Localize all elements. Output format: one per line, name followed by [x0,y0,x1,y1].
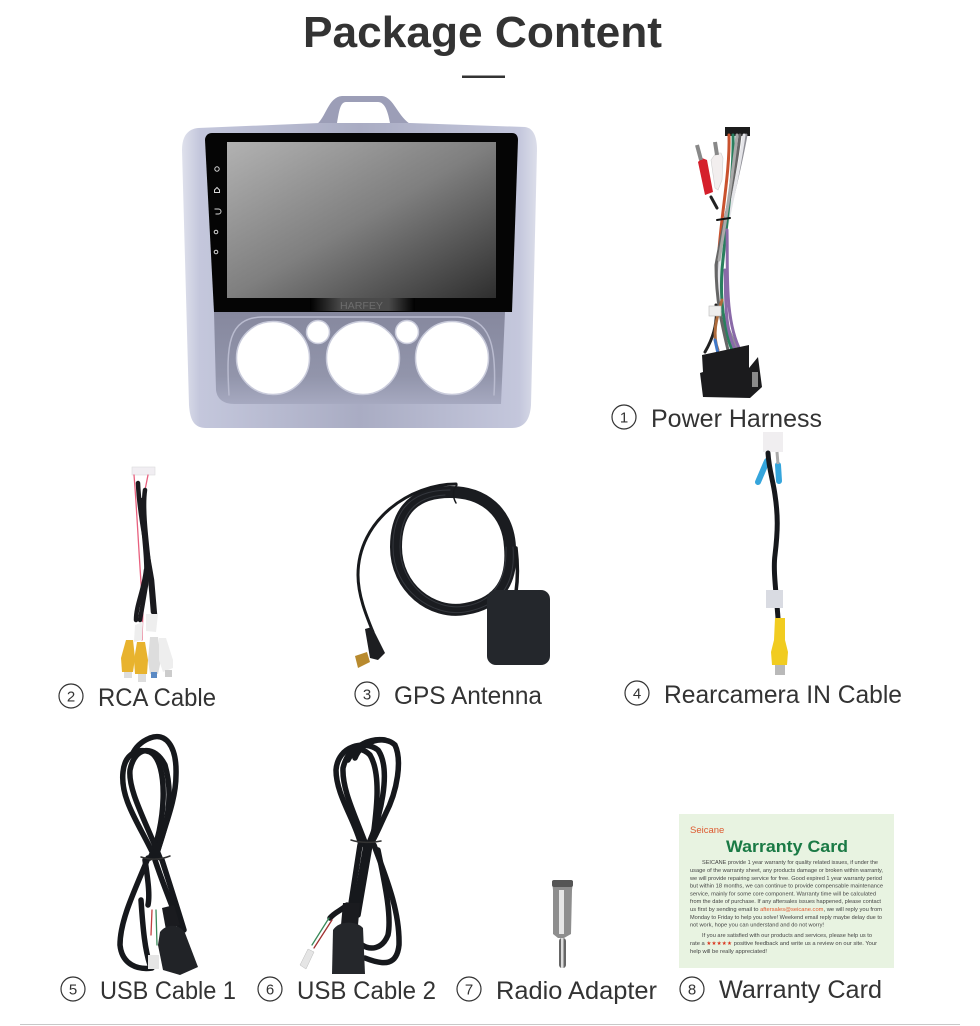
strain relief [341,903,360,925]
label 6: 6 [266,982,274,998]
card body: service, mainly for some core component. Warranty time will be calculated [690,892,876,898]
white connector [763,432,783,452]
brand text: HARFEY [340,300,383,312]
card body: SEICANE provide 1 year warranty for quality related issues, if under the [702,860,878,866]
screen [227,142,496,298]
cable tie [141,856,170,859]
side buttons [214,167,221,254]
yellow plugs [121,640,135,672]
exposed wires [312,918,329,945]
label 2: RCA Cable [98,684,216,712]
card body: not work, hope you can understand and do not worry! [690,922,824,928]
card body: Monday to Friday to help you solve! Weekend email reply maybe delay due to [690,915,882,921]
antenna puck [487,590,550,665]
card body: If you are satisfied with our products and services, please help us to [702,933,872,939]
angled connector [365,627,385,660]
white sleeves [134,622,143,642]
USB plug [158,926,198,975]
product: rearcamera cable [758,432,788,675]
title: Package Content [303,8,662,57]
tips [151,672,157,678]
product: GPS antenna [355,484,550,668]
label 5: 5 [69,982,77,998]
card body: us first by sending email to aftersales@seicane.com, we will reply you from [690,907,882,913]
label 3: GPS Antenna [394,682,542,710]
pink wires [134,475,148,640]
strain relief [162,905,180,930]
label sleeve [766,590,783,608]
card body: from the date of purchase. If any aftersales issues happened, please contact [690,899,881,905]
lead cable [358,484,456,632]
top connector [725,127,750,136]
black connector [700,345,762,398]
small clip [300,949,314,969]
product: head unit [182,96,537,428]
card body: help will be really appreciated! [690,949,767,955]
label 4: Rearcamera IN Cable [664,681,902,709]
black wires [136,483,155,620]
product: warranty card [679,814,894,968]
product: radio adapter [552,880,573,968]
lower control panel [214,312,505,404]
card title: Warranty Card [726,837,848,856]
small clip [148,955,159,969]
label 4: 4 [633,686,641,702]
card body: rate a ★★★★★ positive feedback and write us a review on our site. Your [690,940,877,947]
card body: but within 18 months, we can continue to provide compensable maintenance [690,884,883,890]
black band [717,218,730,220]
cable tie [351,840,381,842]
label 7: 7 [465,982,473,998]
yellow plug [771,618,788,665]
product: RCA cable [121,467,173,682]
label 1: 1 [620,410,628,426]
label 8: 8 [688,982,696,998]
card body: we will provide repairing service for free. Good expired 1 year warranty period [689,876,882,882]
black wire [768,453,778,618]
vents [236,320,488,394]
gold tip [355,652,370,668]
label 5: USB Cable 1 [100,977,236,1005]
card body [689,860,883,955]
white connector [132,467,155,475]
card brand: Seicane [690,825,724,836]
product: USB cable 2 [300,740,399,974]
red plug [698,158,713,195]
brand strip [310,298,415,311]
black bezel [205,133,518,312]
blue tips [758,461,767,482]
label 8: Warranty Card [719,976,882,1004]
pin [559,938,566,968]
cable tie [454,485,457,503]
product: USB cable 1 [120,737,198,975]
handle [316,96,412,125]
silver frame [182,123,537,428]
wires [705,135,746,358]
label 7: Radio Adapter [496,977,657,1005]
coil [396,492,510,610]
exposed wires [151,910,152,935]
label 2: 2 [67,688,75,706]
panel arc [228,317,495,395]
small white clip [709,306,721,316]
white plug [711,153,723,190]
USB plug [332,923,365,974]
label 3: 3 [363,686,371,704]
label 6: USB Cable 2 [297,977,436,1005]
metal barrel [552,881,573,938]
title underline [462,76,505,78]
metal tip [775,665,785,675]
product: power harness [697,127,762,398]
card body: usage of the warranty sheet, any products damage or broken within warranty, [690,868,883,874]
label 1: Power Harness [651,405,822,433]
white plugs [148,637,161,674]
